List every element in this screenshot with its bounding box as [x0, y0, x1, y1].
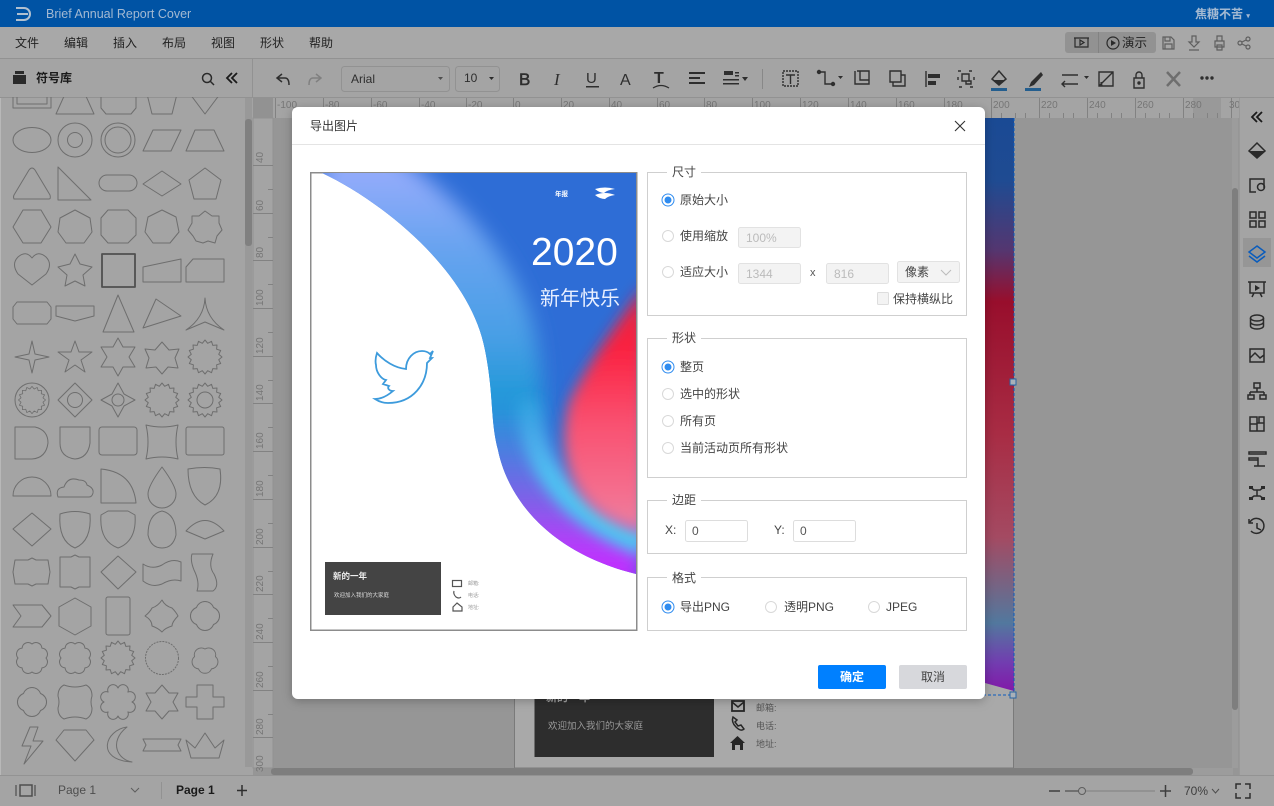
menu bar: 帮助	[309, 36, 333, 50]
shape library panel	[0, 89, 253, 775]
left ruler: 220	[255, 575, 266, 592]
left ruler: 160	[255, 432, 266, 449]
symbol library heading	[13, 70, 72, 85]
icon: app logo	[16, 8, 30, 20]
dark contact box: 新的一年	[546, 690, 590, 704]
button: confirm	[818, 665, 886, 689]
dialog title: 导出图片	[310, 119, 358, 133]
top ruler: 300	[1229, 100, 1246, 111]
present button	[1065, 32, 1156, 53]
text format icons: U	[586, 70, 597, 87]
dark contact box	[534, 690, 714, 757]
top ruler: -100	[277, 100, 297, 111]
option: fit size: 适应大小	[680, 264, 728, 279]
horizontal scrollbar	[271, 768, 1233, 775]
icon: logo swooshes	[595, 188, 615, 199]
left ruler: 40	[255, 151, 266, 163]
library scrollbar	[245, 98, 252, 767]
option: whole page: 整页	[680, 359, 704, 374]
top ruler: 160	[898, 100, 915, 111]
top ruler: 100	[754, 100, 771, 111]
menu bar: 插入	[113, 36, 137, 50]
icon: twitter bird	[375, 351, 433, 403]
contact rows: 电话:	[756, 720, 777, 731]
file action icons	[1163, 36, 1250, 50]
side panel icons	[1248, 112, 1266, 533]
vertical scrollbar	[1232, 118, 1238, 768]
top ruler: 280	[1185, 100, 1202, 111]
top ruler: 0	[515, 100, 521, 111]
top ruler: -60	[373, 100, 388, 111]
margin x: X:	[665, 523, 676, 537]
left ruler: 240	[255, 623, 266, 640]
poster sheet behind dialog	[511, 118, 1016, 768]
panel: size	[648, 165, 966, 316]
option: fit size: x	[810, 267, 816, 279]
new year text: 新年快乐	[540, 287, 620, 310]
option: all pages: 所有页	[680, 414, 716, 428]
export dialog	[292, 107, 985, 699]
left ruler: 200	[255, 528, 266, 545]
dark text box: 新的一年	[333, 571, 368, 581]
top ruler: 60	[659, 100, 671, 111]
menu bar: 文件	[15, 35, 39, 50]
page view controls	[16, 782, 247, 799]
icon: close	[955, 121, 965, 131]
text format icons: B	[519, 70, 530, 89]
option: export png: 导出PNG	[680, 600, 730, 614]
shape grid	[13, 89, 224, 764]
margin y: 0	[800, 524, 807, 538]
fill and line colour icons	[991, 71, 1043, 91]
library search and collapse	[202, 73, 237, 85]
left ruler: 60	[255, 199, 266, 211]
top ruler: 240	[1089, 100, 1106, 111]
gradient wave	[311, 173, 645, 576]
top ruler: 40	[611, 100, 623, 111]
option: original size: 原始大小	[680, 193, 728, 207]
top ruler: -20	[468, 100, 483, 111]
margin x: 0	[692, 524, 699, 538]
option: whole page	[662, 359, 704, 374]
active layers tab	[1243, 238, 1271, 267]
right side panel	[1239, 98, 1274, 775]
year heading: 2020	[531, 231, 618, 274]
menu bar: 视图	[211, 35, 235, 50]
panel: format	[648, 570, 966, 630]
unit dropdown	[898, 262, 960, 282]
contact list: 电话:	[468, 592, 479, 599]
title bar	[0, 0, 1274, 27]
left ruler: 140	[255, 384, 266, 401]
option: use scale	[662, 228, 800, 248]
panel: margin: 边距	[672, 493, 696, 507]
panel: format: 格式	[672, 570, 696, 585]
page view controls: Page 1	[176, 783, 215, 797]
document title: Brief Annual Report Cover	[46, 7, 191, 21]
toolbar	[0, 59, 1274, 98]
left ruler: 80	[255, 246, 266, 258]
option: jpeg	[868, 600, 917, 614]
symbol library heading: 符号库	[36, 70, 72, 85]
option: fit size: 816	[834, 267, 854, 281]
unit dropdown: 像素	[905, 265, 929, 279]
zoom controls	[1049, 784, 1250, 798]
option: selected shapes: 选中的形状	[680, 386, 740, 401]
text format icons: A	[620, 72, 631, 89]
contact list: 邮箱:	[468, 580, 479, 587]
zoom controls: 70%	[1184, 784, 1208, 798]
font size selector: 10	[464, 71, 478, 85]
top ruler	[253, 98, 1246, 118]
canvas area	[253, 98, 1241, 775]
top ruler: 20	[563, 100, 575, 111]
option: all shapes on active page: 当前活动页所有形状	[680, 440, 788, 455]
menu bar	[0, 27, 1274, 59]
panel: size: 尺寸	[672, 165, 696, 179]
button: cancel	[899, 665, 967, 689]
contact rows: 地址:	[756, 738, 777, 749]
top ruler: 260	[1137, 100, 1154, 111]
left ruler: 100	[255, 289, 266, 306]
button: cancel: 取消	[921, 670, 945, 684]
top ruler: 220	[1041, 100, 1058, 111]
option: fit size	[662, 264, 888, 284]
poster preview	[311, 173, 645, 630]
contact list	[452, 580, 479, 611]
text format icons: T	[654, 70, 664, 87]
top ruler: 80	[706, 100, 718, 111]
top ruler: 120	[802, 100, 819, 111]
top ruler: -40	[421, 100, 436, 111]
left ruler: 300	[255, 755, 266, 772]
option: all pages	[662, 414, 716, 428]
user name: 焦糖不苦 ▾	[1195, 6, 1250, 21]
panel: margin	[648, 493, 966, 554]
shape tool icons	[783, 70, 974, 87]
menu bar: 编辑	[64, 35, 88, 50]
option: transparent png: 透明PNG	[784, 600, 834, 614]
option: use scale: 100%	[746, 231, 777, 245]
report label: 年报	[555, 189, 568, 198]
margin x	[665, 520, 748, 542]
option: use scale: 使用缩放	[680, 228, 728, 243]
page view controls: Page 1	[58, 783, 96, 797]
option: jpeg: JPEG	[886, 600, 917, 614]
top ruler: 140	[850, 100, 867, 111]
left ruler: 280	[255, 718, 266, 735]
top ruler: 200	[993, 100, 1010, 111]
contact rows	[730, 701, 777, 750]
panel: shape	[648, 331, 966, 478]
menu bar: 形状	[260, 36, 284, 50]
button: confirm: 确定	[840, 669, 864, 684]
contact list: 地址:	[468, 604, 479, 611]
left ruler: 260	[255, 671, 266, 688]
arrange icons	[1062, 72, 1213, 88]
poster gradient strip	[985, 118, 1014, 691]
font selector: Arial	[351, 72, 375, 86]
keep ratio checkbox: 保持横纵比	[893, 291, 953, 306]
text format icons: I	[553, 70, 561, 89]
margin y: Y:	[774, 523, 785, 537]
selection outline and handles	[511, 118, 1016, 699]
contact rows: 邮箱:	[756, 702, 777, 713]
present button: 演示	[1122, 35, 1147, 50]
font size selector	[456, 66, 500, 92]
top ruler: -80	[325, 100, 340, 111]
undo redo	[277, 74, 321, 85]
font selector	[342, 66, 450, 92]
left ruler: 180	[255, 480, 266, 497]
left ruler: 120	[255, 337, 266, 354]
dark text box	[325, 562, 441, 615]
dark text box: 欢迎加入我们的大家庭	[334, 591, 390, 599]
option: fit size: 1344	[746, 267, 773, 281]
top ruler: 180	[946, 100, 963, 111]
left ruler	[253, 118, 273, 772]
menu bar: 布局	[162, 36, 186, 50]
panel: shape: 形状	[672, 331, 696, 345]
dark contact box: 欢迎加入我们的大家庭	[548, 720, 644, 732]
status bar	[0, 775, 1274, 806]
text format icons	[519, 70, 748, 89]
margin y	[774, 520, 856, 542]
